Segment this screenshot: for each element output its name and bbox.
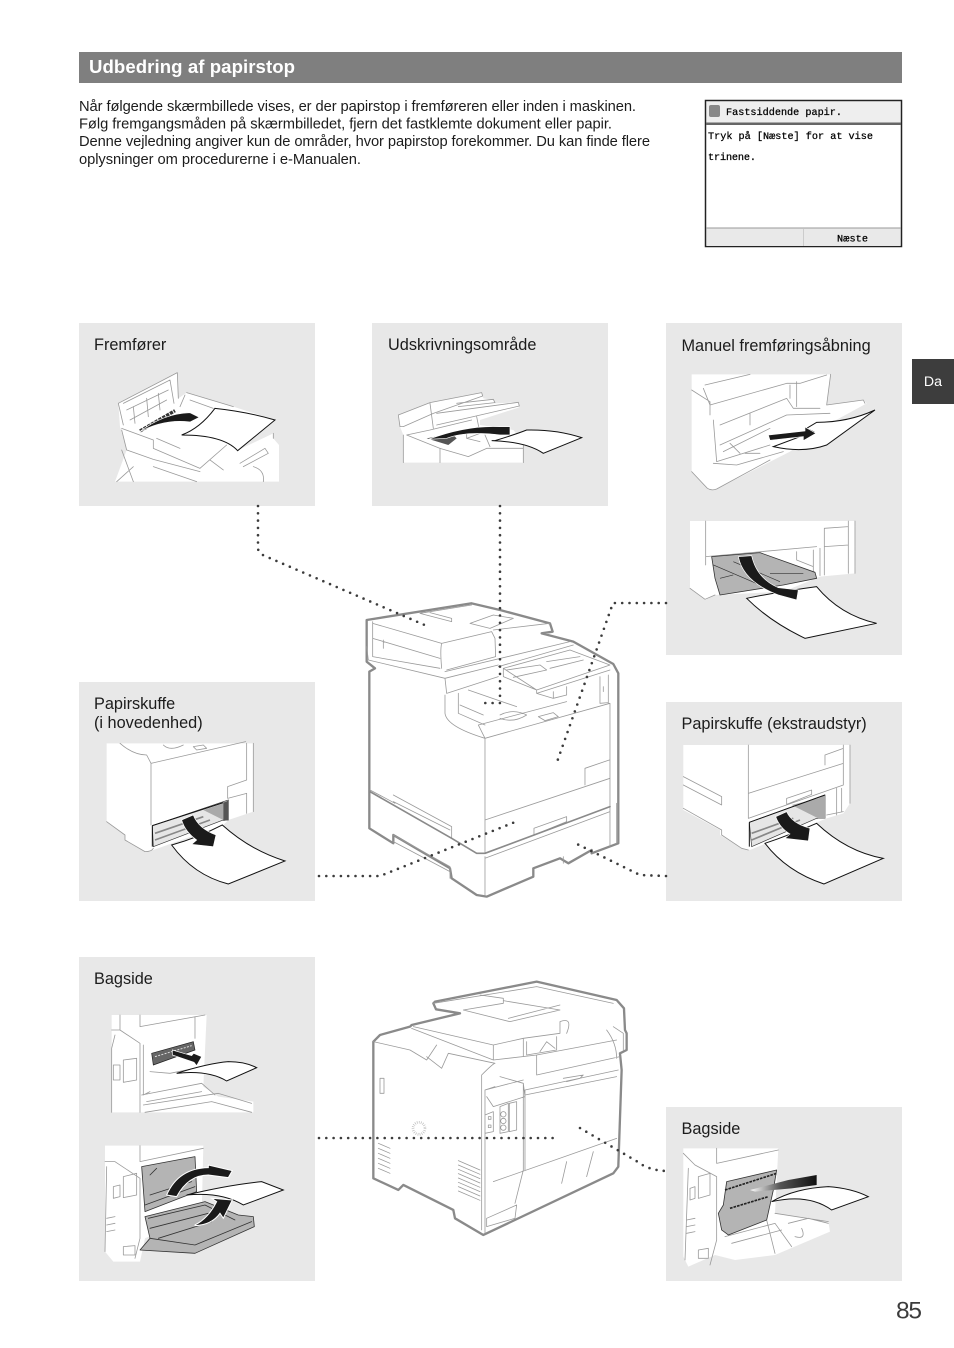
paper sheet — [177, 1062, 257, 1081]
rear door — [140, 1202, 254, 1253]
intro text block — [79, 99, 650, 168]
screen display: jam message — [706, 100, 902, 246]
arrow — [768, 427, 816, 441]
panel: Udskrivningsområde: Udskrivningsområde — [388, 336, 536, 354]
arrow — [750, 1175, 817, 1192]
paper sheet — [747, 587, 877, 638]
arrow — [776, 812, 810, 841]
panel: Bagside (right): Bagside — [682, 1120, 740, 1138]
page number: 85 — [896, 1298, 922, 1324]
panel: Papirskuffe (ekstraudstyr): Papirskuffe (ekstraudstyr) — [682, 715, 867, 733]
side language tab: Da — [924, 374, 942, 390]
illustration: manual feed slot and tray — [690, 374, 877, 638]
section heading bar: Udbedring af papirstop — [89, 56, 295, 77]
paper sheet — [772, 1187, 868, 1210]
panel: Papirskuffe (ekstraudstyr) — [666, 702, 902, 901]
illustration: main unit paper drawer — [107, 742, 285, 884]
arrow — [172, 1050, 202, 1066]
paper sheet — [187, 1182, 283, 1205]
arrow — [428, 426, 510, 439]
illustration: output area with paper — [398, 393, 582, 463]
dotted leader: Udskrivningsområde — [484, 506, 500, 703]
panel: Bagside (right) — [666, 1107, 902, 1281]
side language tab — [912, 359, 954, 404]
intro text block: Denne vejledning angiver kun de områder, hvor papirstop forekommer. Du kan finde flere — [79, 134, 650, 150]
opened inner cover — [142, 1157, 197, 1212]
screen display: jam message: Tryk på [Næste] for at vise — [708, 130, 873, 143]
intro text block: Når følgende skærmbillede vises, er der papirstop i fremføreren eller inden i maskinen. — [79, 99, 636, 115]
panel: Fremfører: Fremfører — [94, 336, 167, 354]
illustration: rear unit views — [105, 1015, 283, 1262]
illustration: document feeder with paper — [115, 373, 279, 482]
paper sheet — [172, 825, 285, 884]
arrow — [738, 556, 798, 600]
panel: Papirskuffe (i hovedenhed) — [79, 682, 315, 901]
arrow — [138, 413, 199, 433]
dotted leader: Bagside right — [580, 1128, 666, 1171]
panel: Manuel fremføringsåbning: Manuel fremføringsåbning — [682, 337, 871, 355]
dotted leader: Manuel fremføring — [557, 603, 666, 762]
paper sheet — [182, 408, 275, 451]
paper cassette — [712, 553, 817, 595]
screen display: jam message: Fastsiddende papir. — [726, 107, 842, 119]
panel: Manuel fremføringsåbning — [666, 323, 902, 655]
section heading bar — [79, 52, 902, 83]
illustration: rear duplex cover — [683, 1148, 868, 1267]
paper sheet — [773, 410, 875, 450]
panel: Bagside (left) — [79, 957, 315, 1281]
arrow up — [167, 1165, 232, 1197]
intro text block: oplysninger om procedurerne i e-Manualen. — [79, 152, 361, 168]
dotted leader: Papirskuffe hovedenhed — [319, 822, 515, 876]
screen display: jam message: trinene. — [708, 152, 756, 164]
arrow lower — [195, 1198, 232, 1226]
dotted leader: Bagside left — [319, 1137, 557, 1139]
dotted leader: Papirskuffe ekstraudstyr — [577, 844, 666, 876]
panel: Bagside (left): Bagside — [94, 970, 153, 988]
illustration: optional paper drawer — [683, 745, 883, 884]
arrow — [182, 815, 216, 847]
printer illustration: front view — [367, 603, 618, 897]
panel: Udskrivningsområde — [372, 323, 608, 506]
dotted leader: Fremfører — [258, 506, 427, 626]
panel: Papirskuffe (i hovedenhed): Papirskuffe — [94, 695, 175, 713]
panel: Papirskuffe (i hovedenhed): (i hovedenhed) — [94, 714, 203, 732]
printer illustration: rear view — [373, 982, 627, 1235]
panel: Fremfører — [79, 323, 315, 506]
opened duplex unit — [718, 1170, 777, 1235]
intro text block: Følg fremgangsmåden på skærmbilledet, fjern det fastklemte dokument eller papir. — [79, 116, 612, 132]
paper sheet — [765, 823, 883, 884]
screen display: jam message: Næste — [837, 234, 868, 246]
paper sheet — [492, 430, 582, 453]
